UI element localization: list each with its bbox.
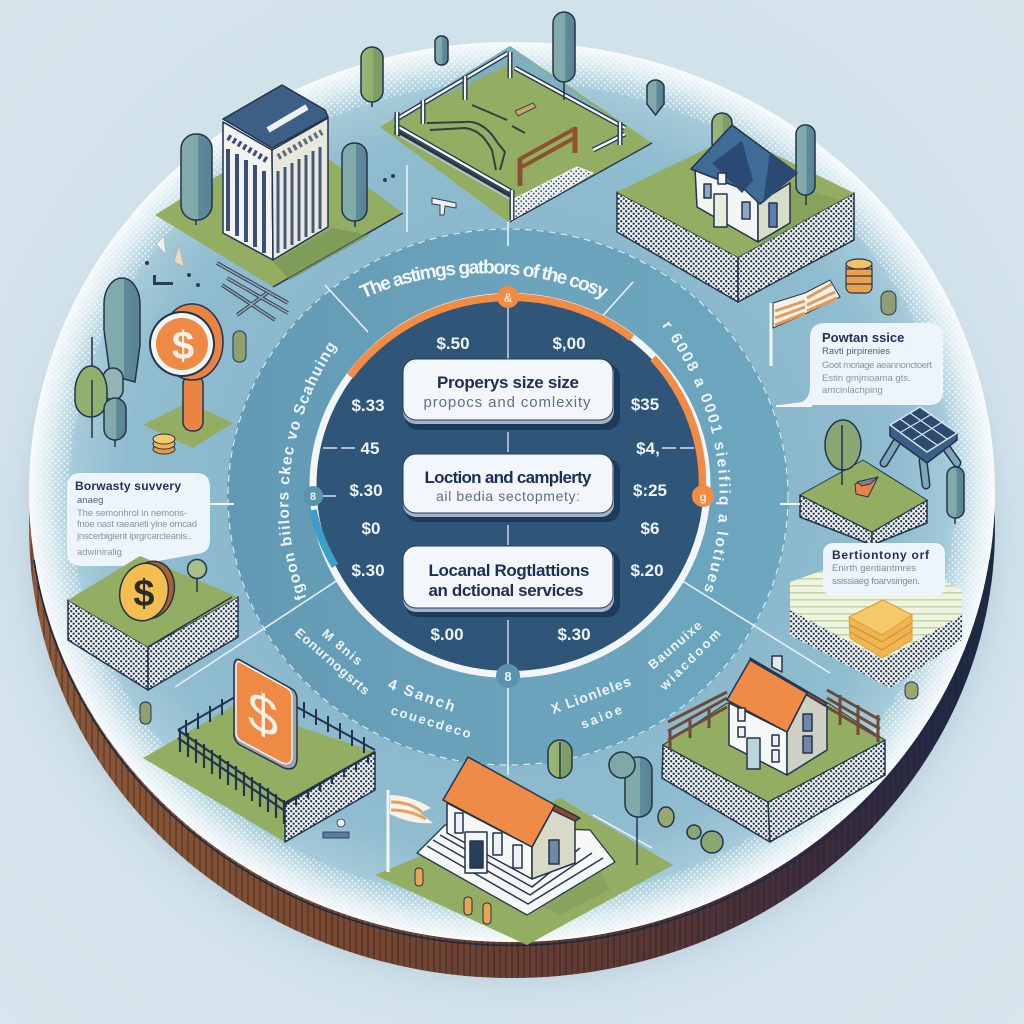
price labels: $:25 bbox=[633, 481, 667, 500]
icon: small sails bbox=[156, 236, 184, 267]
card: regulations: Locanal Rogtlattions bbox=[428, 561, 590, 580]
icon: fenced plot with dollar sign bbox=[140, 659, 375, 842]
icon: block with tree and tent bbox=[800, 420, 927, 545]
ring labels: bottom sector text: saioe bbox=[579, 702, 624, 732]
price labels: $4, bbox=[636, 439, 660, 458]
wood fence bbox=[668, 690, 880, 750]
top node: & bbox=[504, 291, 513, 305]
house bbox=[691, 125, 797, 242]
price labels: $.00 bbox=[430, 625, 464, 644]
iron fence back bbox=[178, 697, 375, 753]
callout: left: fnoe nast raeaneti yine omcad bbox=[77, 519, 197, 530]
orange arc left bbox=[350, 297, 632, 376]
card: property size: Properys size size bbox=[437, 373, 579, 392]
house bbox=[443, 757, 580, 879]
price labels: $.30 bbox=[349, 481, 383, 500]
dotted base patch bbox=[512, 167, 593, 222]
ring labels: bottom sector text: wiacdoom bbox=[656, 626, 724, 694]
icon: tall tree top bbox=[553, 12, 575, 100]
ring heading: curved top text: The astimgs gatbors of the cosy bbox=[358, 260, 608, 300]
ring labels: bottom sector text bbox=[292, 618, 724, 741]
building bbox=[223, 85, 328, 260]
icon: house on block bottom right bbox=[662, 656, 918, 842]
price labels: $.30 bbox=[557, 625, 591, 644]
icon: fenced empty lot bbox=[380, 46, 652, 222]
left node bbox=[303, 486, 323, 506]
icon: left trees bbox=[75, 278, 140, 447]
icon: tree small right bbox=[647, 80, 664, 115]
icon: survey stakes bundle bbox=[217, 263, 288, 320]
ring dividers bbox=[175, 165, 830, 848]
price labels: $,00 bbox=[552, 334, 586, 353]
callout: left: Borwasty suvvery bbox=[75, 479, 181, 493]
price labels: $35 bbox=[631, 395, 659, 414]
card: location bbox=[403, 454, 620, 522]
icon: small tree top bbox=[435, 36, 448, 65]
icon: striped stacked block bbox=[790, 550, 962, 688]
winding path bbox=[427, 105, 525, 170]
dial center line bbox=[316, 298, 695, 675]
icon: block with gold coin bbox=[68, 556, 238, 690]
ring label: left curved text: fgoon biilors ckec vo Scahuing bbox=[278, 342, 338, 600]
callout: right bottom: ssissiaeg foarvsirigen. bbox=[832, 576, 920, 587]
callout: left: The semonhrol in nemoris- bbox=[77, 508, 187, 519]
icon: small mark T bbox=[432, 198, 456, 215]
callout: right top: Powtan ssice bbox=[822, 330, 904, 345]
brown gate bbox=[520, 127, 576, 186]
panel: outer pricing ring bbox=[174, 165, 830, 849]
card: regulations: an dctional services bbox=[428, 581, 584, 600]
callout: left: jnscerbigient iprgrcarcleanis.. bbox=[76, 531, 192, 542]
callout: right top: Ravti pirpirenies bbox=[822, 346, 890, 357]
tree right bbox=[342, 143, 367, 227]
house bbox=[727, 656, 827, 775]
icon: striped flag bottom bbox=[388, 790, 433, 872]
panel: central dark dial bbox=[303, 286, 714, 688]
callout: right top: amcinlachping bbox=[822, 385, 883, 396]
price labels bbox=[349, 334, 667, 644]
ring labels: bottom sector text: Baunuixe bbox=[645, 618, 705, 672]
icon: pill marker left bbox=[233, 331, 246, 362]
icon: main house plot bottom bbox=[375, 757, 673, 945]
price labels: $.33 bbox=[351, 396, 385, 415]
tent marker bbox=[855, 477, 878, 497]
price labels: $6 bbox=[641, 519, 659, 538]
right node bbox=[692, 485, 714, 507]
icon: magnifier dollar sign bbox=[143, 304, 233, 448]
callout: right top: Estin gmjmoama gts. bbox=[822, 373, 911, 384]
callout: right bottom: Bertiontony orf bbox=[832, 548, 930, 562]
price labels: $.30 bbox=[351, 561, 385, 580]
price labels: $.50 bbox=[436, 334, 470, 353]
dollar sign board bbox=[234, 659, 297, 769]
pill marker bbox=[905, 682, 918, 699]
price labels: $.20 bbox=[630, 561, 664, 580]
icon: office building plot bbox=[155, 85, 403, 287]
gold stack bbox=[849, 600, 912, 658]
icon: solar table bbox=[884, 407, 957, 485]
tan plank bbox=[515, 103, 536, 116]
ring labels: bottom sector text: 4 Sanch bbox=[386, 676, 457, 716]
small marker bbox=[140, 702, 151, 724]
icon: bottom trees bbox=[548, 740, 723, 865]
callout: right bottom bbox=[823, 543, 945, 596]
ring label: right curved text: r 6008 a 0001 sieifiiq a lotiues bbox=[662, 322, 731, 592]
bottom node: 8 bbox=[504, 669, 512, 684]
coin: $ bbox=[133, 573, 155, 615]
bottom node bbox=[496, 664, 520, 688]
blue arc bbox=[313, 510, 335, 566]
icon: coin stack top right bbox=[846, 259, 872, 293]
white ring bbox=[313, 296, 707, 674]
top node bbox=[497, 286, 519, 308]
card: location: Loction and camplerty bbox=[424, 468, 592, 487]
icon: house on block top right bbox=[617, 113, 854, 302]
arrow: right side tick bbox=[780, 503, 800, 505]
icon: tree top left of lot bbox=[361, 47, 383, 107]
price labels: 45 bbox=[361, 439, 379, 458]
tree bbox=[825, 420, 861, 485]
orange arc right bbox=[653, 358, 702, 496]
callout: left: anaeg bbox=[77, 495, 103, 506]
price labels: $0 bbox=[362, 519, 380, 538]
tree left bbox=[181, 134, 212, 225]
dollar sign board: $ bbox=[248, 678, 278, 751]
icon: small marks near plot bbox=[145, 174, 395, 287]
iron fence front bbox=[178, 728, 375, 824]
icon: striped flag right bbox=[771, 280, 840, 366]
card: property size: propocs and comlexity bbox=[424, 394, 591, 411]
callout: right top bbox=[776, 323, 943, 406]
right node: g bbox=[699, 490, 707, 504]
icon: pill marker bbox=[881, 291, 896, 315]
coin bbox=[114, 556, 180, 626]
fence bbox=[395, 52, 625, 220]
ring labels: bottom sector text: couecdeco bbox=[389, 703, 473, 741]
icon: magnifier dollar sign: $ bbox=[172, 324, 194, 368]
icon: small coins left bbox=[153, 434, 175, 454]
card: location: ail bedia sectopmety: bbox=[436, 488, 580, 504]
icon: blue pill tree bbox=[947, 467, 964, 524]
callout: right top: Goot mcriage aeannonctoert bbox=[822, 360, 932, 371]
trees beside house bbox=[712, 113, 815, 205]
small tree bbox=[188, 560, 206, 592]
ring labels: bottom sector text: Eonurnogsrts bbox=[292, 625, 373, 698]
ring labels: bottom sector text: M 8nis bbox=[319, 626, 365, 668]
ring labels: bottom sector text: X Lionleles bbox=[549, 673, 633, 717]
icon: small plate marker bbox=[323, 819, 349, 838]
callout: right bottom: Enirth gentiantmres bbox=[832, 563, 916, 574]
steps bbox=[417, 825, 615, 915]
stakes bbox=[415, 868, 491, 924]
left node: 8 bbox=[310, 491, 316, 503]
callout: left: adwiniralig bbox=[77, 547, 122, 558]
callout: left bbox=[67, 473, 234, 566]
card: regulations bbox=[403, 546, 620, 617]
card: property size bbox=[403, 359, 620, 430]
